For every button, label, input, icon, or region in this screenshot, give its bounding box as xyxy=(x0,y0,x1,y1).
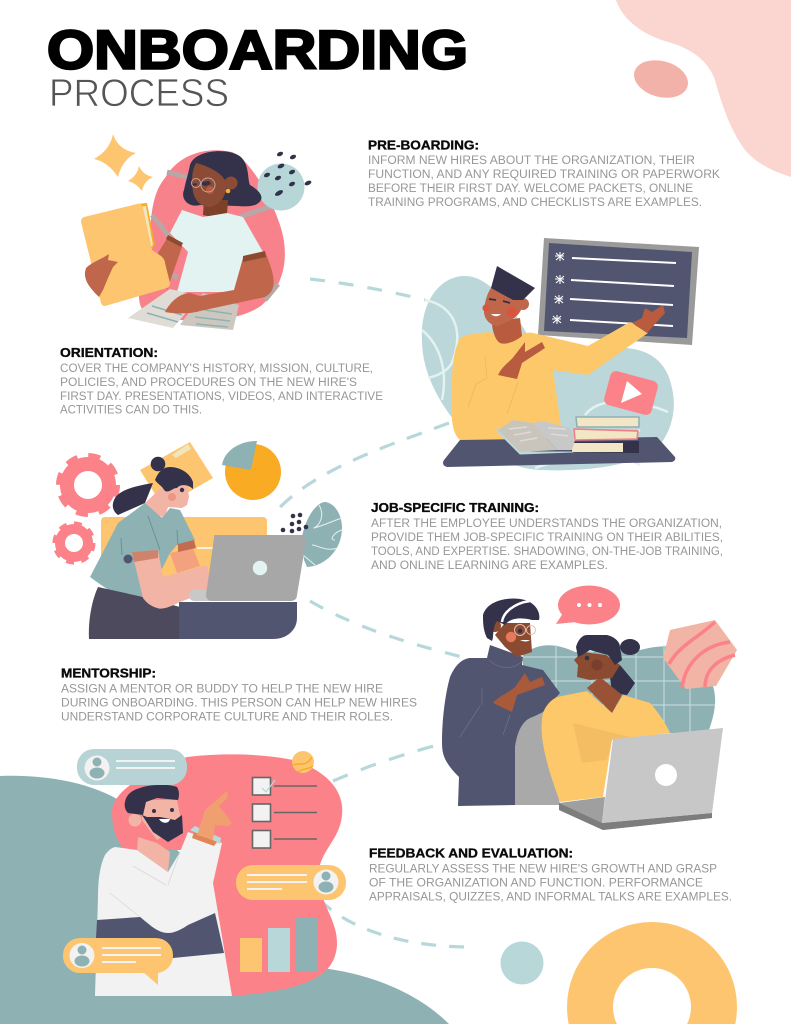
illustration: bearded man with feedback chart xyxy=(63,749,346,996)
text block: feedback and evaluation: REGULARLY ASSESS THE NEW HIRE'S GROWTH AND GRASP xyxy=(369,862,717,876)
text block: mentorship xyxy=(61,666,417,724)
text block: orientation: POLICIES, AND PROCEDURES ON THE NEW HIRE'S xyxy=(60,375,357,389)
illustration: woman with folder xyxy=(81,134,312,330)
text block: job-specific training: PROVIDE THEM JOB-SPECIFIC TRAINING ON THEIR ABILITIES, xyxy=(371,530,723,544)
text block: feedback and evaluation xyxy=(369,846,732,904)
illustration: mentor and mentee xyxy=(442,586,737,830)
connector: step 1 to 2 xyxy=(310,279,425,300)
text block: job-specific training: JOB-SPECIFIC TRAINING: xyxy=(371,500,539,515)
text block: mentorship: UNDERSTAND CORPORATE CULTURE AND THEIR ROLES. xyxy=(61,710,393,724)
background hill: bottom left xyxy=(0,776,449,1024)
text block: orientation xyxy=(60,345,383,416)
title: ONBOARDING xyxy=(47,18,468,80)
text block: mentorship: DURING ONBOARDING. THIS PERSON CAN HELP NEW HIRES xyxy=(61,696,417,710)
text block: job-specific training: AFTER THE EMPLOYEE UNDERSTANDS THE ORGANIZATION, xyxy=(371,516,722,530)
text block: job-specific training: TOOLS, AND EXPERTISE. SHADOWING, ON-THE-JOB TRAINING, xyxy=(371,544,723,558)
decorative circle and donut: bottom right xyxy=(500,942,714,1024)
text block: orientation: FIRST DAY. PRESENTATIONS, VIDEOS, AND INTERACTIVE xyxy=(60,389,383,403)
text block: pre-boarding xyxy=(368,138,721,209)
illustration: woman at laptop with gears xyxy=(56,441,342,639)
title xyxy=(47,18,468,115)
text block: mentorship: MENTORSHIP: xyxy=(61,666,156,680)
text block: job-specific training xyxy=(371,500,723,572)
text block: pre-boarding: INFORM NEW HIRES ABOUT THE ORGANIZATION, THEIR xyxy=(368,153,695,167)
connector: step 5 to circle xyxy=(320,900,471,947)
background blob: top right xyxy=(616,0,791,177)
connector: step 4 to 5 xyxy=(333,743,445,781)
text block: orientation: COVER THE COMPANY'S HISTORY, MISSION, CULTURE, xyxy=(60,361,373,375)
text block: feedback and evaluation: APPRAISALS, QUIZZES, AND INFORMAL TALKS ARE EXAMPLES. xyxy=(369,890,732,904)
text block: job-specific training: AND ONLINE LEARNING ARE EXAMPLES. xyxy=(371,558,608,572)
title: PROCESS xyxy=(49,72,229,115)
text block: orientation: ACTIVITIES CAN DO THIS. xyxy=(60,402,202,416)
connector: step 3 to 4 xyxy=(310,601,475,660)
text block: mentorship: ASSIGN A MENTOR OR BUDDY TO HELP THE NEW HIRE xyxy=(61,682,383,696)
text block: feedback and evaluation: FEEDBACK AND EVALUATION: xyxy=(369,846,573,860)
text block: pre-boarding: TRAINING PROGRAMS, AND CHECKLISTS ARE EXAMPLES. xyxy=(368,195,702,209)
text block: pre-boarding: PRE-BOARDING: xyxy=(368,138,479,152)
illustration: man presenting at board xyxy=(422,238,699,470)
text block: feedback and evaluation: OF THE ORGANIZATION AND FUNCTION. PERFORMANCE xyxy=(369,876,703,890)
connector: step 2 to 3 xyxy=(272,423,449,516)
text block: orientation: ORIENTATION: xyxy=(60,345,158,360)
text block: pre-boarding: FUNCTION, AND ANY REQUIRED TRAINING OR PAPERWORK xyxy=(368,167,721,181)
text block: pre-boarding: BEFORE THEIR FIRST DAY. WELCOME PACKETS, ONLINE xyxy=(368,181,693,195)
